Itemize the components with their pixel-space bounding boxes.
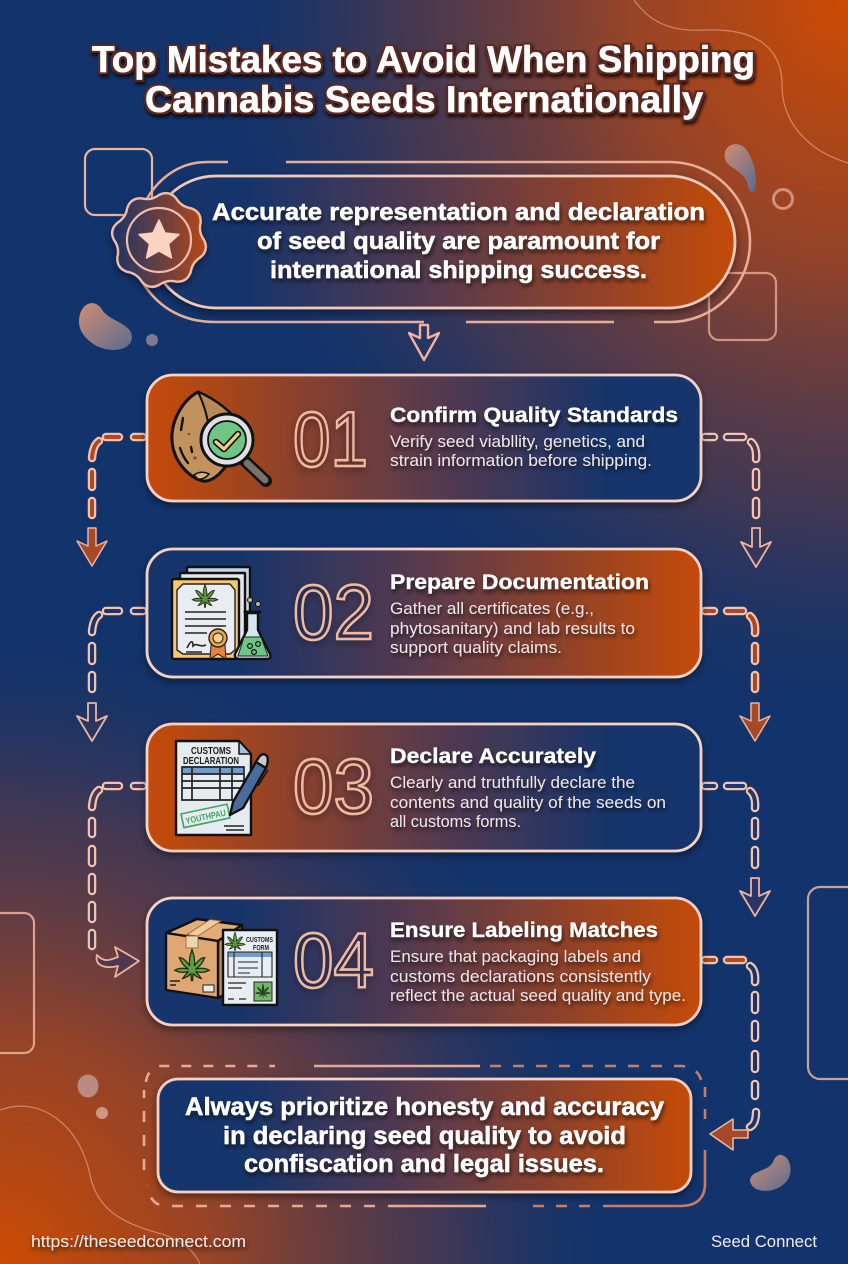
title: Cannabis Seeds Internationally bbox=[145, 79, 703, 120]
closing text: in declaring seed quality to avoid bbox=[223, 1122, 626, 1150]
icon: customs declaration and pen: YOUTHPAU bbox=[185, 808, 227, 826]
closing dashed frame bbox=[144, 1066, 705, 1206]
step 02 text: support quality claims. bbox=[390, 639, 562, 657]
step 04 text bbox=[390, 919, 686, 1005]
number 03: 03 bbox=[293, 742, 374, 830]
icon: parcel and customs form: CUSTOMS bbox=[246, 935, 273, 944]
intro text: Accurate representation and declaration bbox=[212, 199, 705, 226]
step 04 text: reflect the actual seed quality and type. bbox=[390, 987, 686, 1005]
closing box bbox=[158, 1079, 691, 1192]
footer brand: Seed Connect bbox=[711, 1232, 817, 1251]
panel: step 03 bbox=[147, 724, 701, 851]
number 04: 04 bbox=[293, 916, 374, 1004]
icon: seed with magnifier bbox=[172, 392, 266, 481]
step 03 text: Declare Accurately bbox=[390, 745, 596, 768]
step 01 text: Verify seed viabllity, genetics, and bbox=[390, 433, 645, 451]
icon: customs declaration and pen: CUSTOMS bbox=[191, 746, 231, 757]
icon: parcel and customs form bbox=[166, 919, 277, 1005]
number 01: 01 bbox=[293, 395, 368, 483]
step 02 text bbox=[390, 571, 649, 657]
arrow: intro to step 1 bbox=[409, 325, 439, 360]
intro text: international shipping success. bbox=[270, 257, 647, 284]
step 03 text: contents and quality of the seeds on bbox=[390, 794, 666, 812]
arrow: step 4 right connector bbox=[705, 960, 756, 1150]
arrow: step 3 right connector bbox=[705, 786, 770, 916]
step 04 text: Ensure Labeling Matches bbox=[390, 919, 658, 942]
panel: step 01 bbox=[147, 375, 701, 501]
intro text: of seed quality are paramount for bbox=[257, 228, 660, 255]
arrow: step 1 right connector bbox=[705, 437, 771, 567]
step 03 text bbox=[390, 745, 666, 831]
panel: closing statement bbox=[144, 1066, 705, 1206]
panel: step 02 bbox=[147, 549, 701, 677]
closing text: Always prioritize honesty and accuracy bbox=[185, 1093, 664, 1121]
step 04 text: Ensure that packaging labels and bbox=[390, 948, 641, 966]
step 01 text: strain information before shipping. bbox=[390, 452, 652, 470]
closing text bbox=[185, 1093, 664, 1178]
step 03 text: Clearly and truthfully declare the bbox=[390, 774, 635, 792]
icon: customs declaration and pen bbox=[176, 741, 268, 835]
closing text: confiscation and legal issues. bbox=[244, 1150, 604, 1178]
arrow: step 2 left connector bbox=[77, 611, 143, 741]
icon: parcel and customs form: FORM bbox=[253, 943, 269, 952]
title: Top Mistakes to Avoid When Shipping bbox=[92, 39, 755, 80]
footer url: https://theseedconnect.com bbox=[31, 1232, 246, 1251]
intro outer frame lines bbox=[140, 162, 750, 322]
title bbox=[92, 39, 755, 120]
step 02 text: Prepare Documentation bbox=[390, 571, 649, 594]
arrow: step 3 left connector bbox=[92, 786, 143, 977]
icon: customs declaration and pen: DECLARATION bbox=[183, 756, 239, 767]
intro text bbox=[212, 199, 705, 284]
panel: step 04 bbox=[147, 898, 701, 1025]
icon: star badge bbox=[112, 193, 206, 287]
step 03 text: all customs forms. bbox=[390, 813, 521, 831]
step 01 text: Confirm Quality Standards bbox=[390, 404, 678, 427]
intro pill bbox=[150, 176, 735, 308]
arrow: step 1 left connector bbox=[77, 437, 143, 566]
step 04 text: customs declarations consistently bbox=[390, 968, 652, 986]
arrow: step 2 right connector bbox=[705, 611, 770, 741]
step 02 text: Gather all certificates (e.g., bbox=[390, 600, 594, 618]
icon: certificates and flask bbox=[172, 567, 270, 659]
step 01 text bbox=[390, 404, 678, 470]
panel: intro statement bbox=[112, 162, 750, 360]
step 02 text: phytosanitary) and lab results to bbox=[390, 620, 635, 638]
number 02: 02 bbox=[293, 568, 374, 656]
